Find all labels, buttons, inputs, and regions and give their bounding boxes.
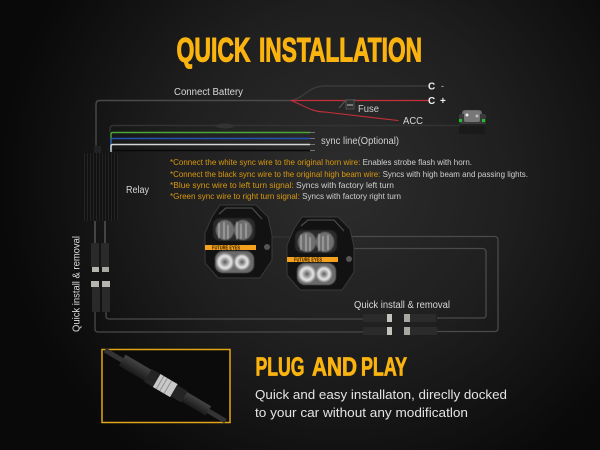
title: QUICK	[176, 32, 251, 70]
harness wires to lamps	[95, 236, 498, 332]
lamp 1	[205, 205, 272, 278]
sync wires	[111, 132, 315, 152]
wiring notes	[170, 157, 528, 201]
lamp 2	[287, 217, 354, 290]
quick connectors	[363, 314, 437, 335]
battery terminal positive	[428, 96, 446, 107]
heading: plug and play: PLAY	[361, 352, 407, 382]
inline connector on switch wire	[216, 124, 234, 128]
battery terminal negative	[428, 81, 444, 92]
icon: fuse	[339, 100, 356, 109]
battery terminal negative: C	[428, 82, 435, 92]
photo panel: plug detail	[101, 344, 230, 428]
lamp 1: FUTURE EYES	[212, 246, 241, 252]
icon: switch	[459, 110, 486, 134]
battery wire bundle	[96, 86, 428, 145]
relay	[82, 146, 118, 221]
battery terminal negative: -	[441, 81, 444, 91]
description text: to your car without any modificatlon	[255, 405, 468, 420]
title	[176, 32, 422, 70]
label: sync line: sync line(Optional)	[321, 136, 399, 147]
title: INSTALLATION	[259, 32, 422, 70]
label: relay: Relay	[126, 185, 149, 196]
label: quick install horizontal: Quick install & removal	[354, 300, 450, 311]
battery terminal positive: +	[440, 96, 446, 107]
wiring notes: *Blue sync wire to left turn signal: Syncs with factory left turn	[170, 180, 394, 190]
wiring notes: *Green sync wire to right turn signal: Syncs with factory right turn	[170, 191, 401, 201]
label: connect battery: Connect Battery	[174, 87, 243, 98]
switch wire	[110, 126, 460, 132]
wiring notes: *Connect the white sync wire to the original horn wire: Enables strobe flash with horn.	[170, 157, 472, 167]
label: acc: ACC	[403, 116, 423, 127]
lamp 2: FUTURE EYES	[294, 258, 323, 264]
relay lead connectors	[91, 221, 110, 312]
label: fuse: Fuse	[358, 104, 379, 115]
wiring notes: *Connect the black sync wire to the original high beam wire: Syncs with high beam and passing lights.	[170, 169, 528, 179]
heading: plug and play	[256, 352, 407, 382]
battery terminal positive: C	[428, 96, 435, 107]
heading: plug and play: PLUG	[256, 352, 304, 382]
vertical label: quick install: Quick install & removal	[72, 236, 82, 332]
description text	[255, 387, 507, 420]
heading: plug and play: AND	[312, 352, 357, 382]
description text: Quick and easy installaton, direclly docked	[255, 387, 507, 402]
cable	[101, 344, 229, 428]
